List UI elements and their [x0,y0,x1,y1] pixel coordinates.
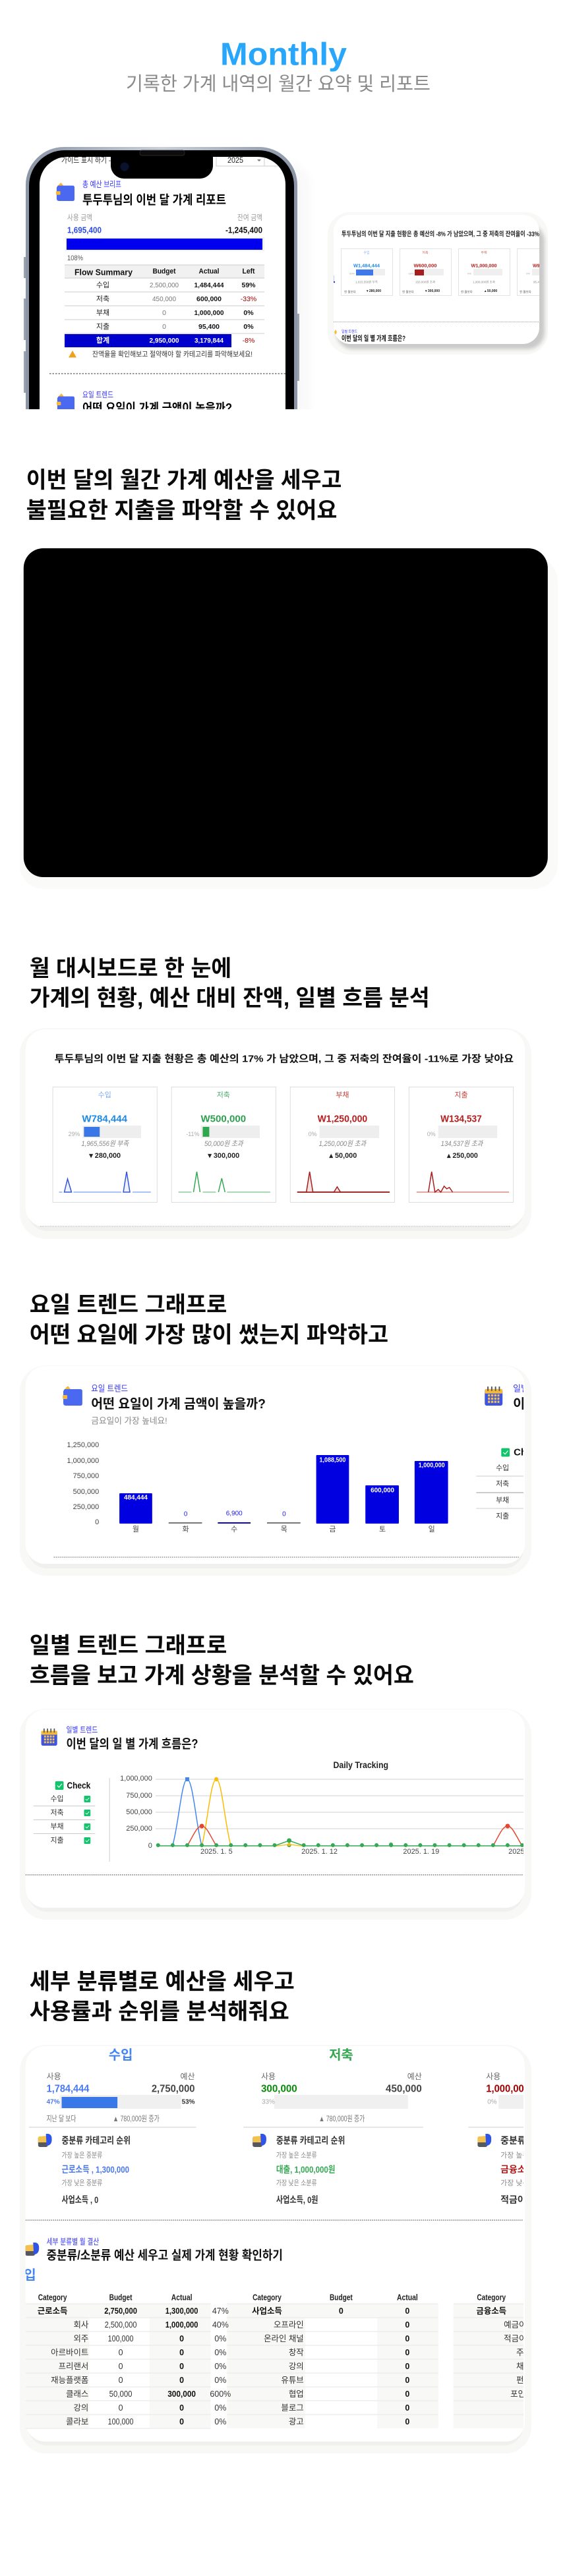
clipped check list: 저축 [496,1479,509,1488]
bar chart: weekday spending: 484,444 [124,1494,148,1502]
used and left amounts: 사용 금액 [67,214,92,222]
used and left amounts: -1,245,400 [225,225,262,235]
line chart: daily tracking: 1,000,000 [120,1775,152,1783]
table: earned income: 회사 [73,2320,89,2330]
bar chart: weekday spending: 250,000 [73,1503,99,1511]
column: savings: 가장 낮은 소분류 [276,2179,317,2187]
column: debt (clipped): 가장 높은 중분류 [500,2151,551,2160]
column: debt (clipped): 0% [487,2098,497,2106]
table: earned income: 40% [212,2320,229,2330]
mini card: savings: -33% [407,272,414,275]
KPI card: spending [409,1087,514,1202]
check list: 수입 [50,1794,64,1803]
table: earned income [38,2292,231,2426]
KPI card: income: W784,444 [82,1113,128,1125]
flow summary table: 59% [241,281,256,289]
flow summary table: 450,000 [152,295,176,303]
clipped income label: 수입 [12,2268,36,2283]
column: debt (clipped): 금융소득 [500,2164,535,2175]
table: business income: Actual [397,2292,418,2303]
column: income: 수입 [109,2047,133,2063]
bar chart: weekday spending: 1,000,000 [67,1457,99,1465]
bar chart: weekday spending: 토 [379,1526,386,1533]
column: income: 근로소득 , 1,300,000 [62,2164,129,2175]
bar chart: weekday spending: 500,000 [73,1488,99,1496]
flow summary table: 600,000 [196,295,222,303]
line chart: daily tracking: 2025. 1. 5 [200,1848,233,1856]
section heading: monthly budget: 이번 달의 월간 가계 예산을 세우고 [26,468,342,493]
table: financial income (clipped): 채권 [516,2362,531,2371]
column: debt (clipped): 중분류 카테고리 [500,2135,562,2146]
section heading: category budgets: 사용률과 순위를 분석해줘요 [30,1999,289,2024]
icon: calendar [485,1387,502,1406]
table: financial income (clipped): 펀드 [516,2376,531,2385]
mini card: debt: ▴ 50,000 [484,289,497,293]
phone screen [40,157,285,409]
column: savings: 가장 높은 소분류 [276,2151,317,2160]
KPI card: spending: 지출 [454,1091,468,1099]
table: earned income: 근로소득 [38,2306,67,2316]
column: income: 예산 [181,2072,195,2081]
column: savings: 450,000 [386,2083,422,2095]
bar chart: weekday spending: 일 [429,1524,435,1533]
progress bar: 108% [67,254,83,262]
table: business income [252,2292,418,2426]
line chart: daily tracking: 2025. 1. 12 [301,1848,338,1856]
sparkline [417,1172,509,1192]
column: debt (clipped): 가장 낮은 중분류 [500,2179,551,2187]
mini card: spending: 0% [526,272,530,275]
next section preview [334,329,405,341]
KPI card: debt: 부채 [336,1091,349,1099]
mini card: income [342,249,393,295]
icon: pie cube [25,2243,39,2256]
clipped check list: Check [514,1446,544,1458]
mini card: savings: 150,000원 초과 [415,279,435,285]
column: income: 2,750,000 [152,2083,195,2095]
mini card: spending: 95,400원 [533,279,545,283]
flow summary table: 0 [162,323,166,331]
check list [34,1778,109,1862]
column: savings: 사용 [261,2072,276,2081]
table: financial income (clipped): 포인트 [510,2390,533,2399]
line chart: daily tracking: 2025. 1. 19 [403,1848,439,1856]
chart title: Daily Tracking [333,1760,388,1770]
flow summary table: -33% [241,295,256,303]
mini card: spending [517,248,539,296]
flow summary table: 수입 [96,281,109,289]
flow summary table: 1,000,000 [194,309,224,317]
bar chart: weekday spending: 목 [281,1525,287,1533]
table: earned income: 600% [210,2390,231,2399]
bar chart: weekday spending: 월 [133,1525,139,1533]
eyebrow: 일별 트렌드 [66,1725,98,1734]
mini card: income: 전 월보다 [344,290,357,294]
line chart: daily tracking: 250,000 [126,1825,152,1833]
panel: dashboard [20,1028,531,1239]
panel: daily trend [20,1709,545,1920]
column: debt (clipped) [468,2072,523,2204]
KPI card: income [53,1087,157,1202]
mini card: savings: 저축 [422,250,429,255]
flow summary table: 저축 [96,295,109,303]
clipped check list: 지출 [496,1512,509,1520]
table: earned income: 강의 [73,2403,88,2413]
panel heading: 이번 달의 일 별 가계 흐름은? [66,1736,198,1752]
table: business income: 광고 [289,2417,304,2426]
table: business income: 0 [405,2417,409,2426]
table: business income: 0 [405,2376,409,2385]
table: business income: 0 [405,2403,409,2413]
mini card: debt: 전 월보다 [461,290,473,294]
next section preview: 일별 트렌드 [342,329,357,334]
check list: 지출 [50,1836,64,1845]
flow summary table: 3,179,844 [194,337,224,345]
bar chart: weekday spending: 1,088,500 [320,1456,346,1464]
mini card: spending: W95,400 [533,264,551,269]
mini card: savings: 전 월보다 [402,290,415,294]
mini card: income: ▾ 280,000 [366,289,381,293]
KPI card: spending: W134,537 [440,1113,482,1125]
table: earned income: 0% [214,2362,226,2371]
KPI card: savings: ▾ 300,000 [207,1152,239,1160]
table: earned income: 0 [179,2348,184,2357]
flow summary table: 2,950,000 [149,337,179,345]
table: earned income: 50,000 [109,2390,133,2399]
table: financial income (clipped): 적금이자 [504,2334,534,2343]
KPI card: debt: 1,250,000원 초과 [319,1139,367,1148]
bar chart: weekday spending: 수 [231,1525,237,1533]
clipped check list: 부채 [496,1496,509,1504]
mini card: spending: 전 월보다 [520,290,532,294]
table: earned income: 47% [212,2306,229,2316]
phone mockup [24,147,299,409]
mini card: savings: ▾ 300,000 [425,289,440,293]
flow summary table: 부채 [96,308,109,317]
mini card: debt: 0% [467,272,471,275]
flow summary table: 95,400 [198,323,220,331]
table: earned income: Category [38,2292,67,2303]
mini card: income: 1,015,556원 부족 [355,279,378,285]
KPI card: spending: 0% [427,1131,436,1137]
column: savings: 사업소득, 0원 [276,2194,318,2205]
eyebrow: 세부 분류별 월 결산 [47,2237,100,2247]
mini card: income: 수입 [363,250,370,255]
bar chart: weekday spending: 금 [329,1526,336,1533]
section heading: weekday trend: 어떤 요일에 가장 많이 썼는지 파악하고 [30,1323,388,1348]
phone screen: 가이드 표시 하기 - [61,156,111,165]
table: earned income: Budget [109,2292,133,2303]
column: savings: ▲ 780,000원 증가 [319,2114,365,2123]
subtitle: 기록한 가계 내역의 월간 요약 및 리포트 [126,73,431,95]
KPI card: savings: 50,000원 초과 [204,1139,243,1148]
KPI card: income: 1,965,556원 부족 [81,1139,129,1148]
phone notch [111,150,213,179]
sparkline [179,1172,270,1192]
column: income: 53% [182,2098,195,2106]
table: business income: 블로그 [281,2403,304,2413]
table: earned income: 콜라보 [66,2417,88,2426]
weekday section preview: 요일 트렌드 [82,390,113,399]
table: earned income: 300,000 [167,2390,196,2399]
icon: calendar [42,1729,57,1746]
KPI card: income: 29% [68,1131,80,1137]
column: savings: 300,000 [261,2083,297,2095]
flow summary table: 0% [243,309,254,317]
warning note: 잔액율을 확인해보고 절약해야 할 카테고리를 파악해보세요! [92,349,253,358]
sparkline [297,1172,390,1192]
table: earned income: 0% [214,2376,226,2385]
table: earned income: 0 [119,2362,123,2371]
column: income: 중분류 카테고리 순위 [62,2135,131,2146]
section heading: daily trend: 일별 트렌드 그래프로 [30,1633,227,1659]
column: debt (clipped): 적금이자 [500,2194,535,2205]
KPI card: income: 수입 [98,1091,111,1099]
table: earned income: 0 [179,2334,184,2343]
line chart: daily tracking: 2025. 1. 26 [508,1848,545,1856]
flow summary table: -8% [243,337,254,345]
table: business income: 온라인 채널 [264,2334,304,2343]
mini card: debt: 부채 [481,250,487,255]
flow summary table: Left [243,268,255,275]
column: income: ▲ 780,000원 증가 [113,2114,160,2123]
column: income: 가장 높은 중분류 [62,2151,102,2160]
panel heading: 중분류/소분류 예산 세우고 실제 가계 현황 확인하기 [47,2248,283,2263]
KPI card: debt: 0% [309,1131,317,1137]
KPI card: savings: 저축 [217,1091,230,1099]
table: earned income: 클래스 [66,2390,88,2399]
dashboard headline: 투두투님의 이번 달 지출 현황은 총 예산의 17% 가 남았으며, 그 중 저축의 잔여율이 -11%로 가장 낮아요 [55,1053,514,1065]
column: debt (clipped): 1,000,000 [486,2083,529,2095]
icon: folder [56,183,75,201]
column: income: 사용 [47,2072,61,2081]
table: business income: Category [253,2292,282,2303]
bar chart: weekday spending: 600,000 [371,1487,395,1495]
panel: weekday trend [20,1365,567,1576]
table: earned income: Actual [171,2292,193,2303]
bar chart: weekday spending: 0 [95,1518,99,1526]
table: earned income: 0 [119,2348,123,2357]
flow summary table [65,265,264,347]
KPI card: debt [290,1087,394,1202]
bar chart: weekday spending: 0 [184,1510,188,1518]
mini card: debt: W1,000,000 [471,264,497,269]
mini card: savings [400,249,451,295]
table: earned income: 0 [179,2362,184,2371]
phone screen: 2025 [227,156,243,165]
flow summary table: 1,484,444 [194,281,224,289]
table: business income: 창작 [289,2348,304,2357]
table: earned income: 100,000 [108,2334,134,2343]
KPI card: savings [171,1087,276,1202]
mini card: savings: W600,000 [414,264,437,269]
clipped next heading [514,1384,523,1410]
flow summary table: Budget [153,268,176,275]
table: financial income (clipped): 금융소득 [476,2306,506,2316]
table: earned income: 0 [179,2417,184,2426]
column: debt (clipped): 사용 [486,2072,500,2081]
table: business income: 0 [405,2348,409,2357]
column: savings [243,2047,423,2205]
section heading: category budgets [30,1969,295,2024]
report heading: 투두투님의 이번 달 가계 리포트 [82,192,226,207]
dashboard screenshot card [328,212,567,355]
mini card: income: W1,484,444 [353,264,380,269]
table: earned income: 2,750,000 [104,2306,137,2316]
lower sections [12,468,567,2453]
line chart: daily tracking: 500,000 [126,1808,152,1816]
table: earned income: 1,300,000 [165,2306,198,2316]
section heading: weekday trend [30,1292,388,1348]
check list: Check [67,1780,91,1790]
table: earned income: 100,000 [108,2417,134,2426]
section heading: monthly budget: 불필요한 지출을 파악할 수 있어요 [26,498,337,523]
sparkline [59,1172,151,1192]
line chart: daily tracking: 750,000 [126,1792,152,1800]
table: business income: Budget [330,2292,353,2303]
KPI card: spending: ▴ 250,000 [446,1152,478,1160]
table: earned income: 0% [214,2403,226,2413]
used and left amounts: 1,695,400 [67,225,102,235]
section heading: daily trend: 흐름을 보고 가계 상황을 분석할 수 있어요 [30,1663,414,1688]
flow summary table: Flow Summary [75,268,133,277]
table: earned income: 0% [214,2334,226,2343]
line chart: daily tracking: 0 [148,1842,152,1850]
icon: folder [63,1386,82,1406]
progress bar [65,237,264,262]
mini card: income: 59% [349,272,355,275]
KPI card: debt: ▴ 50,000 [328,1152,357,1160]
clipped check list [476,1448,523,1520]
mini card: debt [459,249,510,295]
check list: 저축 [50,1808,64,1817]
table: earned income: 재능플랫폼 [51,2376,88,2385]
title: Monthly [220,37,347,72]
column: income: 1,784,444 [47,2083,89,2095]
section heading: dashboard: 월 대시보드로 한 눈에 [30,956,231,981]
table: earned income: 0 [119,2403,123,2413]
used and left amounts: 잔여 금액 [237,214,262,222]
table: business income: 0 [405,2334,409,2343]
next section preview: 이번 달의 일 별 가계 흐름은? [342,333,405,343]
flow summary table: 2,500,000 [150,281,179,289]
table: business income: 0 [405,2362,409,2371]
column: income: 지난 달 보다 [47,2114,76,2123]
clipped next heading: 일별 트렌드 [513,1383,554,1394]
column: savings: 33% [262,2098,275,2106]
table: business income: 0 [405,2320,409,2330]
mini card: debt: 1,000,000원 초과 [473,279,495,285]
table: earned income: 0% [214,2348,226,2357]
section heading: dashboard [30,956,430,1011]
table: earned income: 1,000,000 [165,2320,198,2330]
bar chart: weekday spending: 화 [183,1525,189,1533]
column: savings: 예산 [407,2072,422,2081]
table: earned income: 외주 [73,2334,88,2343]
flow summary table: 합계 [96,335,109,345]
flow summary table: 0 [162,309,166,317]
bar chart: weekday spending [67,1441,448,1533]
column: income: 47% [47,2098,60,2106]
KPI card: savings: W500,000 [200,1113,246,1125]
check list: 부채 [50,1822,64,1831]
column: income [29,2047,196,2205]
bar chart: weekday spending: 6,900 [226,1510,243,1518]
table: business income: 유튜브 [281,2376,304,2385]
weekday section preview: 어떤 요일이 가계 금액이 높을까? [82,401,232,415]
warning note [69,351,252,357]
column: savings: 저축 [329,2047,353,2063]
table: business income: 사업소득 [252,2306,282,2316]
table: earned income: 0 [179,2403,184,2413]
bar chart: weekday spending: 0 [282,1510,286,1518]
KPI card: debt: W1,250,000 [318,1113,367,1125]
budget tables [26,2292,534,2428]
table: business income: 0 [405,2390,409,2399]
column: savings: 대출, 1,000,000원 [276,2164,335,2175]
table: business income: 협업 [289,2390,304,2399]
bar chart: weekday spending: 750,000 [73,1472,99,1480]
section heading: weekday trend: 요일 트렌드 그래프로 [30,1292,227,1318]
table: financial income (clipped): Category [477,2292,506,2303]
table: business income: 0 [339,2306,343,2316]
table: financial income (clipped) [476,2292,534,2399]
section heading: category budgets: 세부 분류별로 예산을 세우고 [30,1969,295,1995]
clipped check list: 수입 [496,1464,509,1472]
table: earned income: 프리랜서 [59,2362,88,2371]
KPI card: savings: -11% [186,1131,199,1137]
table: earned income: 아르바이트 [51,2348,88,2357]
panel subheading: 금요일이 가장 높네요! [91,1416,167,1426]
panel: category budgets [12,2045,562,2453]
section heading: daily trend [30,1633,414,1688]
flow summary table: Actual [199,268,219,275]
weekday section preview [57,391,231,409]
column: income: 가장 낮은 중분류 [62,2179,102,2187]
table: earned income: 0 [179,2376,184,2385]
black video panel [20,548,558,889]
column: income: 사업소득 , 0 [62,2194,98,2205]
bar chart: weekday spending: 1,250,000 [67,1441,99,1449]
panel heading: 어떤 요일이 가계 금액이 높을까? [91,1396,266,1412]
flow summary table: 0% [243,323,254,331]
table: business income: 0 [405,2306,409,2316]
section heading: monthly budget [26,468,342,523]
bar chart: weekday spending: 1,000,000 [419,1462,445,1470]
table: earned income: 0% [214,2417,226,2426]
section heading: dashboard: 가계의 현황, 예산 대비 잔액, 일별 흐름 분석 [30,986,430,1011]
report eyebrow: 총 예산 브리프 [82,180,121,189]
line chart: daily tracking [120,1775,545,1856]
eyebrow: 요일 트렌드 [91,1383,128,1394]
column: savings: 중분류 카테고리 순위 [276,2135,345,2146]
flow summary table: 지출 [96,322,109,331]
KPI card: spending: 134,537원 초과 [441,1139,483,1148]
table: earned income: 2,500,000 [105,2320,137,2330]
table: earned income: 0 [119,2376,123,2385]
used and left amounts [67,214,262,235]
table: business income: 오프라인 [274,2320,304,2330]
table: business income: 강의 [289,2362,304,2371]
KPI card: income: ▾ 280,000 [88,1152,121,1160]
table: financial income (clipped): 예금이자 [504,2320,534,2330]
table: financial income (clipped): 주식 [516,2348,531,2357]
